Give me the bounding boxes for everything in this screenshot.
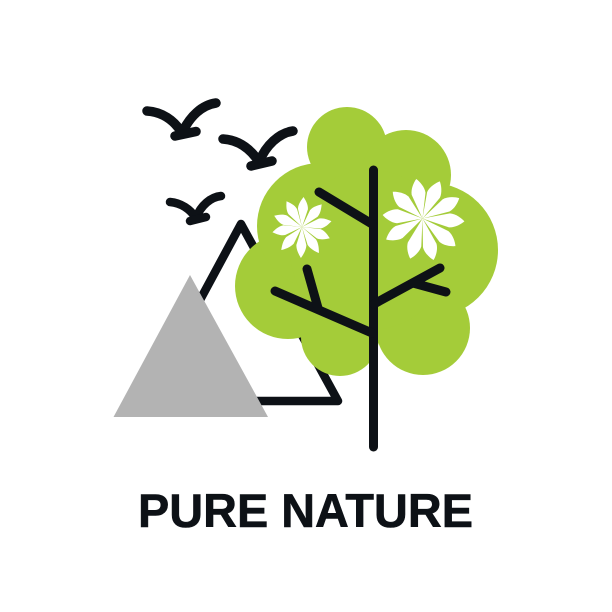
icon: tree crown	[235, 107, 498, 376]
icon: bird top	[147, 103, 216, 136]
icon: bird lower	[170, 196, 221, 221]
icon: bird middle	[223, 131, 293, 166]
icon: large white flower	[382, 178, 465, 262]
icon: grey mountain	[114, 275, 268, 417]
icon: tree trunk and branches	[275, 170, 446, 447]
icon: outlined mountain	[200, 224, 338, 401]
title: PURE NATURE	[138, 485, 473, 538]
icon: small white flower	[272, 197, 332, 258]
